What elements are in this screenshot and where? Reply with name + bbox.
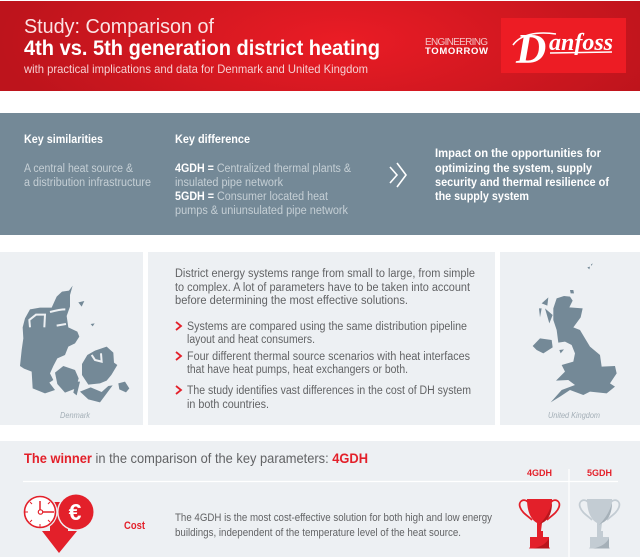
tagline: TOMORROW — [425, 46, 488, 57]
header banner — [0, 1, 640, 91]
key difference: Key difference — [175, 132, 250, 146]
logo: Danfoss: D — [515, 27, 546, 73]
icon: cost down: € — [69, 499, 82, 525]
title — [23, 15, 380, 76]
tagline — [425, 37, 488, 57]
panel: United Kingdom map — [500, 252, 640, 425]
tagline: ENGINEERING — [425, 37, 488, 48]
intro text — [175, 268, 475, 307]
bullet list: in both countries. — [187, 399, 269, 411]
panel: Denmark map — [0, 252, 143, 425]
impact text: security and thermal resilience of — [435, 175, 610, 189]
panel: the winner — [0, 441, 640, 557]
key difference: 4GDH = Centralized thermal plants & — [175, 163, 351, 175]
bullet list — [176, 321, 471, 411]
label: cost: Cost — [124, 520, 145, 532]
column headers: 5GDH — [587, 468, 612, 478]
impact text: optimizing the system, supply — [435, 161, 592, 175]
intro text: to complex. A lot of parameters have to be taken into account — [175, 282, 471, 294]
cost description: buildings, independent of the temperature level of the heat source. — [175, 527, 461, 539]
key difference — [175, 132, 351, 217]
title: 4th vs. 5th generation district heating — [24, 36, 380, 60]
key similarities — [24, 132, 151, 189]
bullet list: Systems are compared using the same distribution pipeline — [187, 321, 467, 333]
intro text: District energy systems range from small to large, from simple — [175, 268, 475, 280]
bullet list: that have heat pumps, heat exchangers or both. — [187, 364, 408, 376]
column headers: 4GDH — [527, 468, 552, 478]
panel: key similarities and difference — [0, 113, 640, 235]
caption: United Kingdom — [548, 411, 600, 420]
logo: Danfoss: anfoss — [549, 30, 613, 56]
icon: grey trophy — [580, 499, 619, 548]
intro text: before determining the most effective solutions. — [175, 295, 408, 307]
heading: The winner in the comparison of the key parameters: 4GDH — [24, 450, 368, 466]
icon: cost down — [22, 493, 95, 553]
key similarities: a distribution infrastructure — [24, 177, 151, 189]
key similarities: Key similarities — [24, 132, 103, 146]
cost description: The 4GDH is the most cost-effective solution for both high and low energy — [175, 512, 492, 524]
impact text — [435, 146, 610, 203]
bullet list: Four different thermal source scenarios with heat interfaces — [187, 351, 470, 363]
key similarities: A central heat source & — [24, 163, 133, 175]
bullet list: The study identifies vast differences in the cost of DH system — [187, 385, 471, 397]
map: Denmark — [20, 286, 129, 402]
title: Study: Comparison of — [24, 15, 214, 38]
impact text: Impact on the opportunities for — [435, 146, 601, 160]
key difference: pumps & uniunsulated pipe network — [175, 205, 348, 217]
map: United Kingdom — [533, 263, 617, 402]
key difference: insulated pipe network — [175, 177, 283, 189]
column headers — [527, 468, 612, 478]
key difference: 5GDH = Consumer located heat — [175, 191, 329, 203]
logo: Danfoss — [501, 18, 626, 73]
cost description — [175, 512, 492, 539]
arrow: double chevron — [390, 163, 406, 187]
panel: description — [148, 252, 495, 425]
impact text: the supply system — [435, 189, 529, 203]
bullet list: layout and heat consumers. — [187, 334, 315, 346]
icon: red trophy — [520, 499, 559, 548]
caption: Denmark — [60, 411, 91, 420]
title: with practical implications and data for Denmark and United Kingdom — [23, 62, 368, 76]
